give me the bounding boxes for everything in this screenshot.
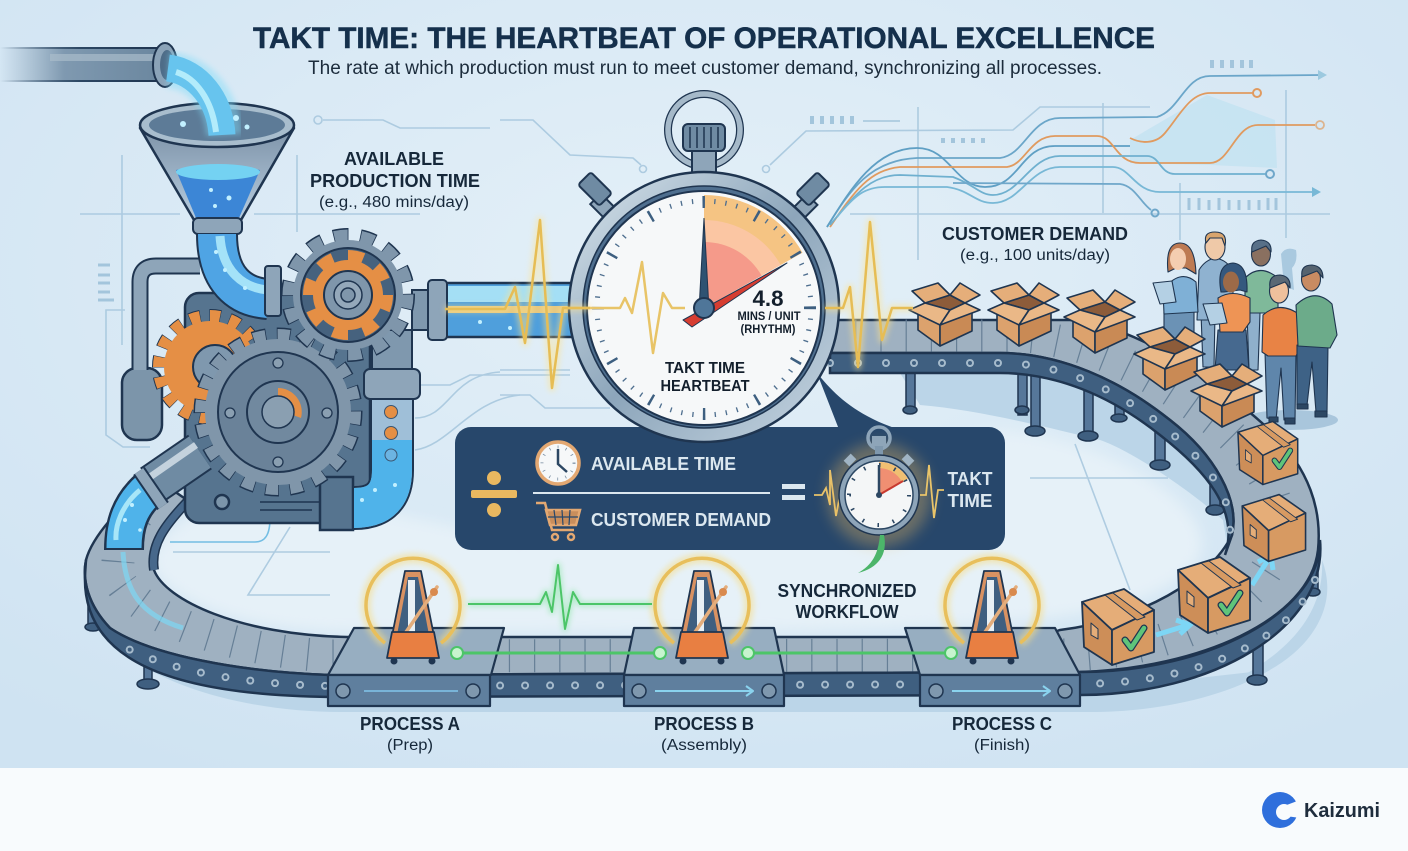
metronome C	[945, 558, 1039, 664]
label: customer demand: CUSTOMER DEMAND	[591, 510, 771, 530]
label: process B: (Assembly)	[661, 737, 747, 754]
logo text: Kaizumi	[1304, 799, 1380, 822]
icon: logo mark	[1262, 792, 1300, 828]
large gray gear	[202, 336, 354, 488]
metronome B	[655, 558, 749, 664]
machine: pipes and gears	[0, 43, 575, 550]
label: customer demand: (e.g., 100 units/day)	[960, 247, 1110, 264]
person: woman in orange	[1203, 263, 1250, 370]
orange sector	[704, 195, 802, 308]
dial readout: HEARTBEAT	[660, 378, 750, 395]
formula callout	[455, 373, 1005, 573]
circuit line background	[80, 90, 1330, 595]
heartbeat pulse left	[445, 220, 590, 388]
dial ticks	[597, 201, 811, 415]
icon: cart	[536, 503, 580, 540]
water stream	[168, 68, 224, 135]
inner floor of conveyor loop	[150, 430, 1202, 632]
label: available production time	[310, 148, 480, 211]
belt slats	[118, 336, 1279, 656]
label: process A: PROCESS A	[360, 714, 460, 734]
station C	[905, 628, 1080, 706]
inner left chain band	[153, 502, 187, 570]
pipe to stopwatch	[412, 280, 575, 340]
water trail on belt	[123, 552, 183, 628]
funnel	[140, 103, 294, 234]
fraction line	[533, 492, 770, 494]
small stopwatch	[827, 427, 931, 547]
orange gear	[160, 317, 260, 417]
people: customer group	[1153, 232, 1338, 430]
small pulse right	[920, 465, 944, 518]
label: takt time: TIME	[948, 491, 992, 511]
station B	[624, 628, 784, 706]
metronome A	[366, 558, 460, 664]
green connector A-B	[451, 647, 666, 659]
lower chain band	[85, 540, 1320, 697]
title: TAKT TIME: THE HEARTBEAT OF OPERATIONAL EXCELLENCE	[253, 22, 1155, 55]
blue elbow pipe	[217, 234, 281, 316]
person: man in orange sweater	[1262, 275, 1302, 424]
dial readout: 4.8	[752, 286, 784, 311]
heartbeat inside	[563, 262, 685, 353]
finished boxes with checkmarks	[1082, 421, 1306, 665]
dial readout: TAKT TIME	[665, 360, 745, 377]
synchronization links	[451, 565, 957, 659]
highlighted area under trend	[1130, 95, 1277, 168]
process stations	[328, 628, 1080, 706]
top ring and crown	[668, 94, 740, 174]
label: takt time: TAKT	[948, 469, 993, 489]
label: available time: AVAILABLE TIME	[591, 454, 736, 474]
water bubbles	[123, 115, 512, 532]
small pulse left	[814, 470, 840, 516]
right gray pipe	[354, 330, 420, 508]
callout panel	[455, 427, 1005, 550]
belt surface	[85, 320, 1319, 675]
logo: Kaizumi	[1262, 792, 1380, 828]
top supply pipe	[0, 43, 177, 87]
label: process A: (Prep)	[387, 737, 433, 754]
label: process C: PROCESS C	[952, 714, 1052, 734]
icon: clock	[537, 442, 579, 484]
gray side pipe	[140, 266, 200, 370]
station A	[328, 628, 504, 706]
person: back right man	[1245, 240, 1278, 370]
division symbol	[471, 471, 517, 517]
label: process C	[952, 714, 1052, 754]
label: customer demand	[942, 223, 1128, 264]
green connector B-C	[742, 647, 957, 659]
subtitle: The rate at which production must run to meet customer demand, synchronizing all processes.	[308, 58, 1102, 79]
green swoosh	[858, 535, 885, 573]
label: synchronized workflow: SYNCHRONIZED	[778, 581, 916, 601]
dial readout: (RHYTHM)	[740, 322, 796, 336]
label: synchronized workflow	[778, 581, 916, 622]
side buttons	[578, 172, 830, 220]
footer band	[0, 768, 1408, 851]
label: customer demand: CUSTOMER DEMAND	[942, 223, 1128, 244]
label: available production time: PRODUCTION TIME	[310, 170, 480, 191]
label: process B	[654, 714, 754, 754]
heartbeat pulse right	[825, 222, 913, 367]
tick marks decoration	[98, 60, 1276, 300]
dial	[587, 191, 821, 425]
label: process B: PROCESS B	[654, 714, 754, 734]
lower-left outlet pipe	[116, 445, 200, 550]
open boxes on belt	[909, 283, 1262, 427]
label: available production time: (e.g., 480 mins/day)	[319, 194, 469, 211]
green pulse line	[468, 565, 652, 629]
case	[569, 172, 839, 442]
dial readout: MINS / UNIT	[738, 309, 801, 323]
person: back left man	[1197, 232, 1233, 367]
label: synchronized workflow: WORKFLOW	[796, 602, 899, 622]
machine body	[122, 293, 370, 530]
metronomes	[366, 558, 1039, 664]
label: takt time	[948, 469, 993, 511]
person: woman with tablet	[1153, 243, 1198, 342]
conveyor legs	[85, 370, 1320, 689]
equals sign	[782, 484, 805, 500]
label: process C: (Finish)	[974, 737, 1030, 754]
dial readout	[660, 286, 801, 395]
person: man in green sweater	[1296, 265, 1337, 417]
callout tail	[817, 373, 900, 432]
hands	[699, 218, 709, 310]
main stopwatch	[563, 94, 839, 442]
conveyor ground shadows	[88, 373, 1327, 712]
label: process A	[360, 714, 460, 754]
label: available production time: AVAILABLE	[344, 148, 444, 169]
top gear	[289, 236, 407, 354]
conveyor belt	[85, 320, 1320, 697]
chart lines: customer demand trends	[827, 70, 1327, 227]
upper chain band	[830, 353, 1233, 555]
